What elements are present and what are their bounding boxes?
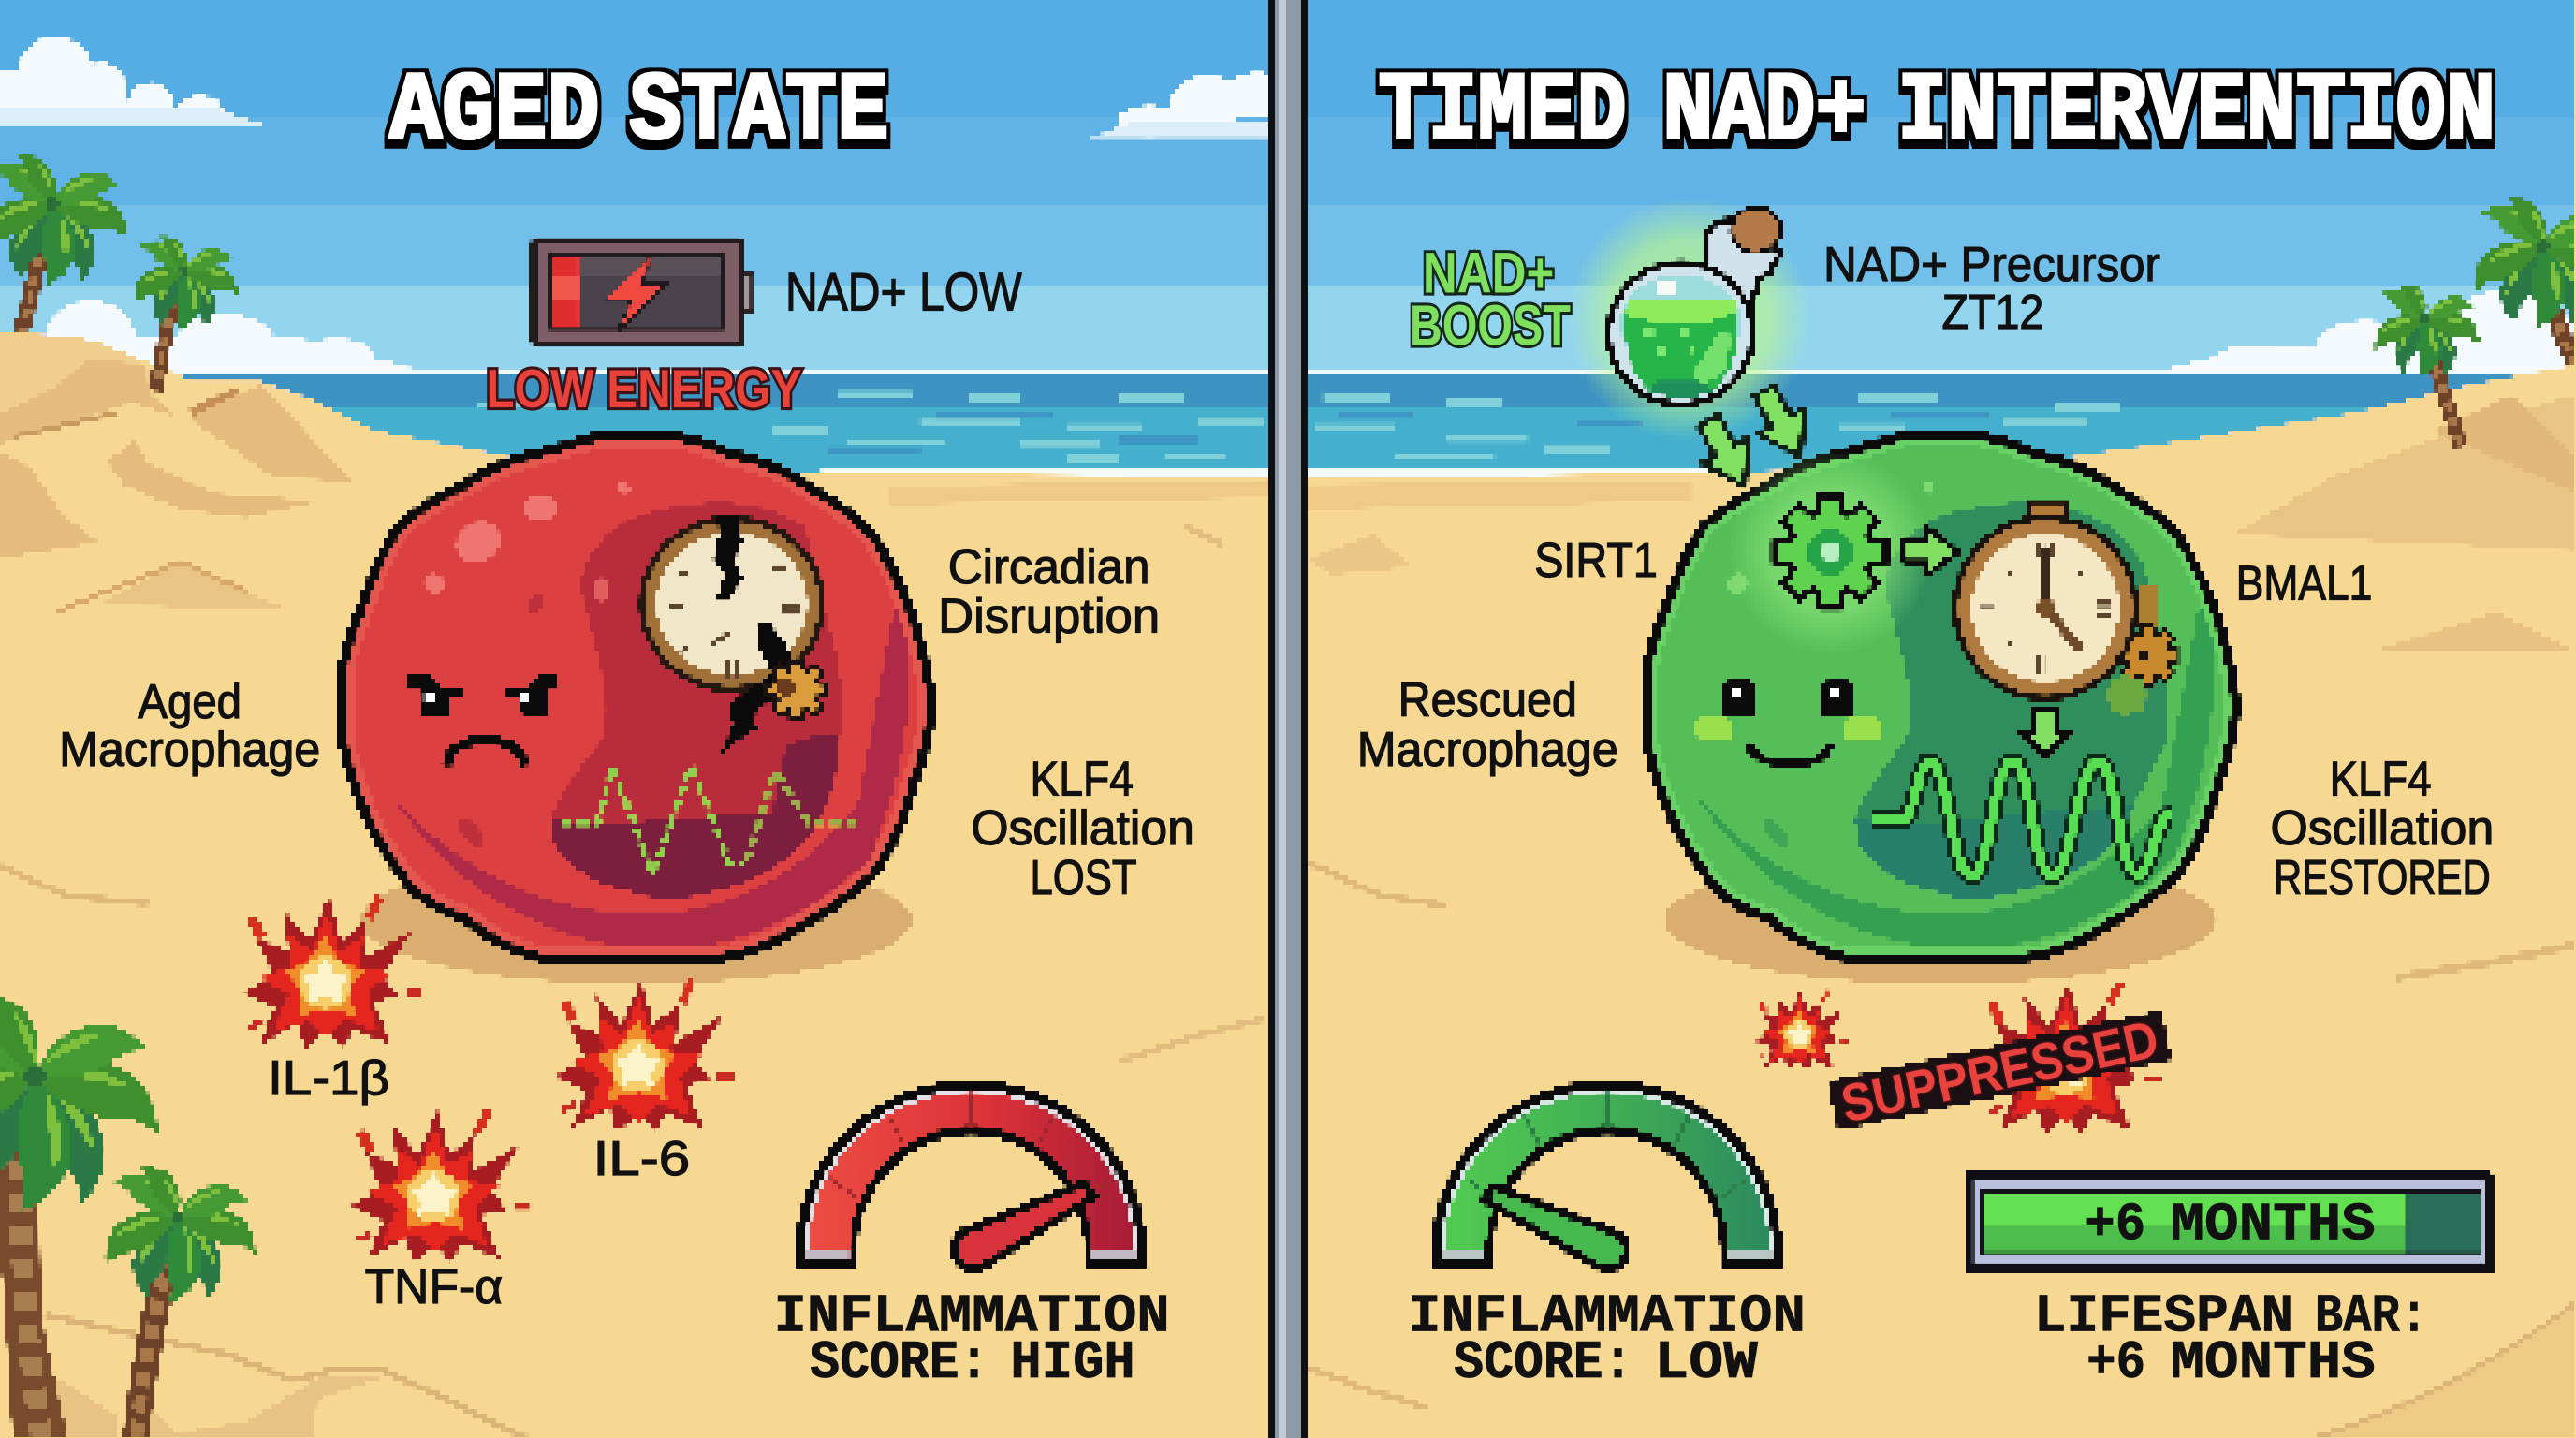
macrophage body: rescued green cell bbox=[1647, 435, 2236, 958]
label: KLF4 oscillation lost: LOST bbox=[1030, 850, 1137, 904]
wave: dashed KLF4 oscillation lost bbox=[560, 766, 859, 874]
label: inflammation score low: SCORE: bbox=[1454, 1333, 1633, 1394]
panel: aged state bbox=[0, 0, 1314, 1438]
title: timed NAD+ intervention: NAD+ bbox=[1662, 58, 1866, 168]
gauge: inflammation high bbox=[795, 1079, 1147, 1269]
label: KLF4 oscillation lost: KLF4 bbox=[1030, 751, 1134, 805]
label: NAD+ low: NAD+ LOW bbox=[785, 263, 1022, 323]
label: KLF4 oscillation restored: RESTORED bbox=[2274, 850, 2491, 904]
label: rescued macrophage bbox=[1357, 672, 1618, 776]
icon: NAD+ precursor flask bbox=[1567, 198, 1810, 440]
icon: cytokine burst IL-6 bbox=[554, 979, 735, 1133]
blob shadow bbox=[1664, 856, 2217, 984]
label: KLF4 oscillation restored bbox=[2271, 751, 2494, 904]
stamp text: suppressed: SUPPRESSED bbox=[1836, 1009, 2163, 1134]
label: lifespan bar +6 months: BAR: bbox=[2315, 1287, 2428, 1348]
arrow: flask to cell bbox=[1685, 407, 1768, 499]
label: KLF4 oscillation lost bbox=[971, 751, 1194, 904]
sand beach and dunes bbox=[1281, 365, 2576, 1438]
label: aged macrophage bbox=[59, 674, 320, 776]
ocean bbox=[1298, 372, 2576, 485]
palm tree bbox=[2365, 276, 2486, 447]
arrow: gear to clock bbox=[1904, 527, 1958, 575]
label: bar value +6 months: +6 bbox=[2085, 1195, 2145, 1255]
title: timed NAD+ intervention: TIMED bbox=[1379, 58, 1627, 168]
palm tree bbox=[124, 228, 245, 391]
label: NAD+ boost: BOOST bbox=[1410, 294, 1571, 359]
label: low energy: LOW ENERGY bbox=[487, 360, 801, 419]
icon: low battery bbox=[531, 237, 755, 348]
happy face bbox=[1695, 681, 1881, 762]
clouds bbox=[2150, 291, 2576, 383]
label: aged macrophage: Aged bbox=[138, 674, 242, 728]
arrow: clock to wave bbox=[2021, 710, 2070, 756]
label: inflammation score low: INFLAMMATION bbox=[1408, 1287, 1806, 1348]
label: bar value +6 months: MONTHS bbox=[2170, 1195, 2376, 1255]
label: circadian disruption: Disruption bbox=[938, 589, 1160, 643]
macrophage body: aged red cell bbox=[342, 435, 931, 958]
label: lifespan bar +6 months: LIFESPAN bbox=[2034, 1287, 2293, 1348]
title: timed NAD+ intervention: INTERVENTION bbox=[1897, 58, 2496, 168]
stamp background: suppressed bbox=[1827, 1010, 2172, 1131]
panel: timed NAD+ intervention bbox=[1281, 0, 2576, 1438]
aged state pixel art scene bbox=[0, 0, 1314, 1438]
lifespan bar bbox=[1965, 1171, 2494, 1273]
title: aged state: STATE bbox=[629, 58, 889, 168]
ocean bbox=[183, 370, 1268, 477]
icon: broken clock bbox=[638, 515, 827, 761]
label: BMAL1: BMAL1 bbox=[2236, 556, 2372, 610]
label: circadian disruption bbox=[938, 539, 1160, 643]
wave: KLF4 oscillation restored bbox=[1873, 761, 2170, 875]
label: IL-1β: IL-1β bbox=[268, 1050, 389, 1105]
label: lifespan bar +6 months: +6 bbox=[2086, 1333, 2145, 1394]
center divider bbox=[1268, 0, 1308, 1438]
label: KLF4 oscillation lost: Oscillation bbox=[971, 800, 1194, 855]
label: lifespan bar +6 months: MONTHS bbox=[2170, 1333, 2376, 1394]
label: circadian disruption: Circadian bbox=[948, 539, 1150, 594]
icon: SIRT1 gear bbox=[1728, 450, 1932, 654]
title: aged state bbox=[389, 58, 889, 168]
label: aged macrophage: Macrophage bbox=[59, 722, 320, 776]
palm tree bbox=[0, 979, 173, 1438]
label: inflammation score high bbox=[774, 1287, 1170, 1394]
gauge: inflammation low bbox=[1431, 1079, 1782, 1269]
icon: cytokine burst TNF-α bbox=[350, 1108, 532, 1262]
palm tree bbox=[91, 1156, 266, 1438]
blob shadow bbox=[359, 856, 912, 984]
label: TNF-α: TNF-α bbox=[365, 1259, 503, 1313]
label: inflammation score high: HIGH bbox=[1010, 1333, 1135, 1394]
palm tree bbox=[2460, 187, 2576, 365]
icon: suppressed cytokine burst bbox=[1982, 980, 2162, 1135]
label: rescued macrophage: Macrophage bbox=[1357, 722, 1618, 776]
sky background bbox=[1298, 0, 2576, 376]
label: inflammation score high: SCORE: bbox=[810, 1333, 989, 1394]
label: NAD+ precursor ZT12 bbox=[1823, 237, 2160, 339]
label: SIRT1: SIRT1 bbox=[1534, 533, 1658, 587]
label: lifespan bar +6 months bbox=[2034, 1287, 2428, 1394]
label: rescued macrophage: Rescued bbox=[1398, 672, 1577, 726]
icon: cytokine burst IL-1β bbox=[242, 895, 423, 1049]
label: NAD+ precursor ZT12: ZT12 bbox=[1942, 285, 2043, 339]
label: inflammation score low: LOW bbox=[1654, 1333, 1758, 1394]
icon: restored clock bbox=[1952, 501, 2177, 716]
label: NAD+ boost: NAD+ bbox=[1423, 241, 1554, 305]
label: inflammation score high: INFLAMMATION bbox=[774, 1287, 1170, 1348]
sky background bbox=[0, 0, 1314, 376]
palm tree bbox=[0, 154, 126, 332]
label: IL-6: IL-6 bbox=[593, 1131, 690, 1185]
icon: small cytokine burst bbox=[1755, 989, 1851, 1070]
sand beach and dunes bbox=[0, 330, 1268, 1438]
intervention pixel art scene bbox=[1281, 0, 2576, 1438]
label: inflammation score low bbox=[1408, 1287, 1806, 1394]
clouds bbox=[0, 37, 1290, 383]
label: NAD+ boost bbox=[1410, 241, 1571, 359]
angry face bbox=[409, 675, 557, 766]
label: KLF4 oscillation restored: KLF4 bbox=[2330, 751, 2432, 805]
label: NAD+ precursor ZT12: NAD+ Precursor bbox=[1823, 237, 2160, 291]
label: bar value +6 months bbox=[2085, 1195, 2376, 1255]
title: timed NAD+ intervention bbox=[1379, 58, 2496, 168]
title: aged state: AGED bbox=[389, 58, 600, 168]
arrow: flask to cell bbox=[1741, 378, 1823, 470]
label: KLF4 oscillation restored: Oscillation bbox=[2271, 800, 2494, 855]
